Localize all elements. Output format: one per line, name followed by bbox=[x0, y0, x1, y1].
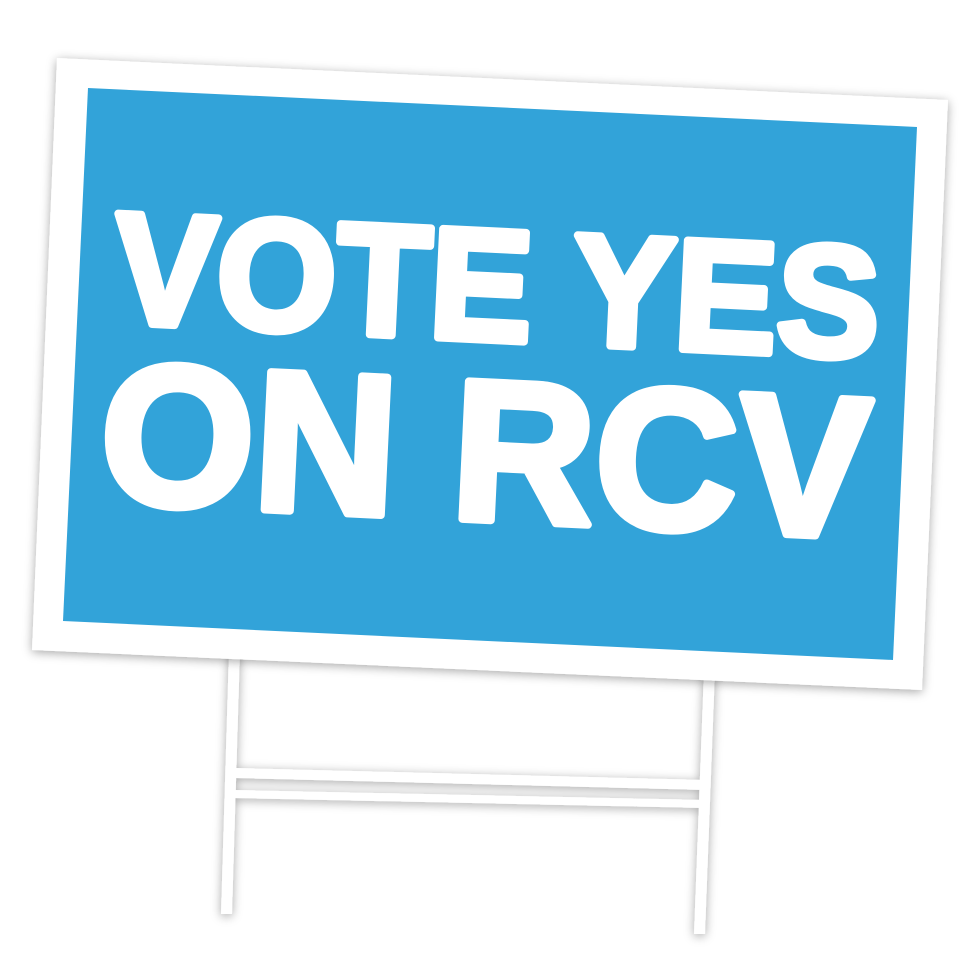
headline line 1: VOTE YES bbox=[110, 180, 884, 392]
sign board bbox=[32, 58, 948, 690]
sign text bbox=[96, 180, 884, 581]
yard sign stakes bbox=[221, 650, 715, 934]
headline line 2: ON RCV bbox=[96, 322, 875, 581]
